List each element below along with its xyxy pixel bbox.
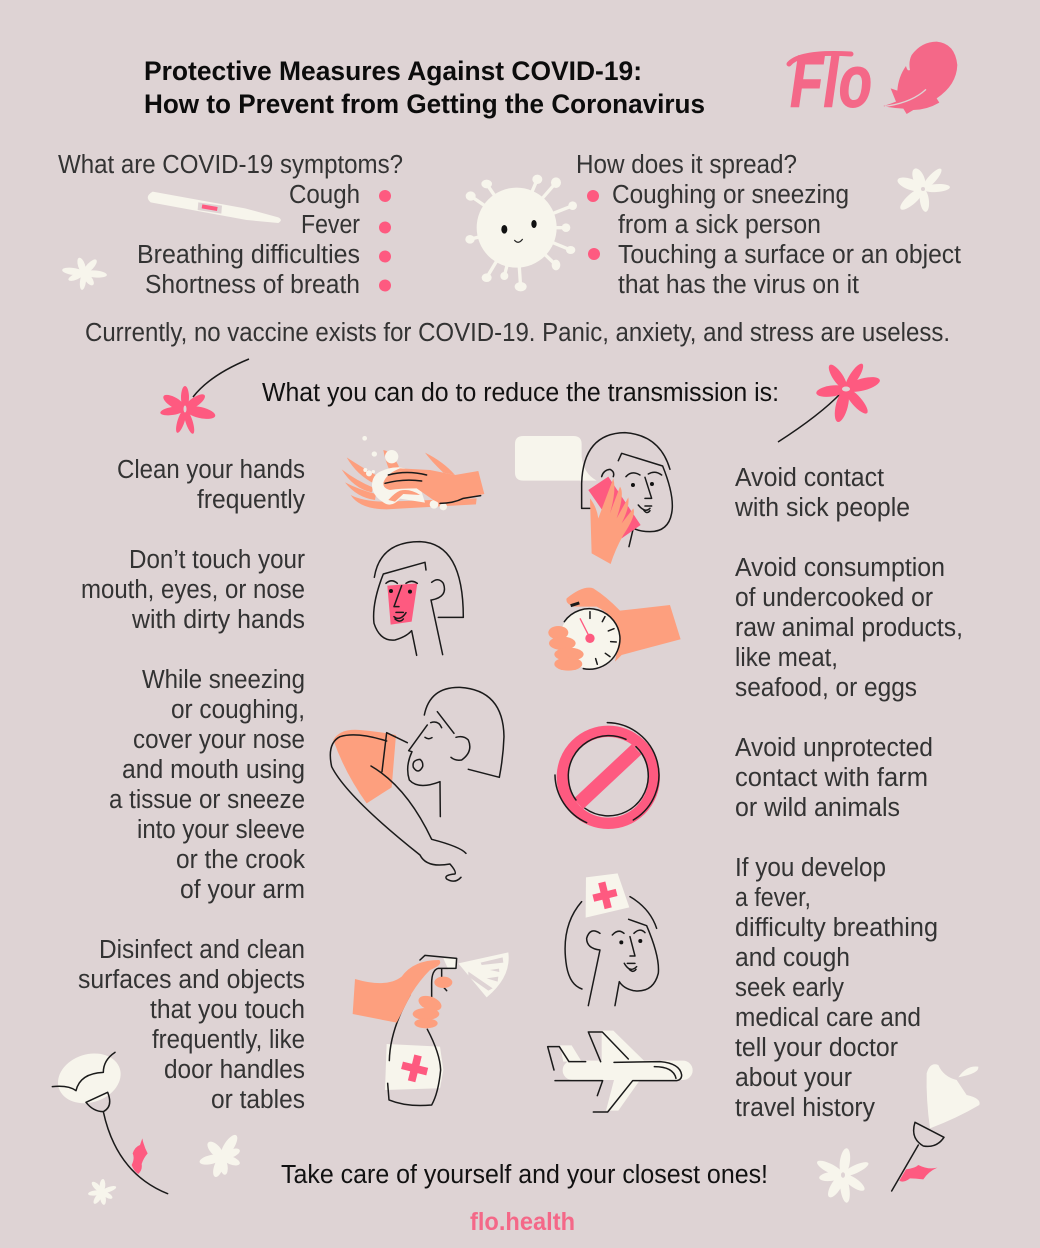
title: How to Prevent from Getting the Coronavirus <box>144 89 705 119</box>
text: avoid raw products: of undercooked or <box>735 584 933 612</box>
text: sneezing advice: into your sleeve <box>137 816 305 844</box>
icon: cream flower bottom left small <box>88 1179 117 1205</box>
logo: Flo: Flo <box>790 40 872 123</box>
text: sneezing advice <box>109 666 305 904</box>
icon: cream tulip bottom right <box>892 1064 980 1191</box>
closing message: Take care of yourself and your closest ones! <box>281 1161 768 1189</box>
text: clean hands: Clean your hands <box>117 456 305 484</box>
no vaccine statement: Currently, no vaccine exists for COVID-19. Panic, anxiety, and stress are useless. <box>85 319 950 347</box>
icon: stopwatch in hand <box>548 588 681 671</box>
text: avoid raw products: raw animal products, <box>735 614 963 642</box>
symptoms list: Cough <box>289 181 360 209</box>
text: avoid animals: contact with farm <box>735 764 928 792</box>
text: disinfect surfaces: surfaces and objects <box>78 966 305 994</box>
text: avoid animals: or wild animals <box>735 794 900 822</box>
text: disinfect surfaces <box>78 936 305 1114</box>
text: fever advice: medical care and <box>735 1004 921 1032</box>
spread list: Coughing or sneezing <box>612 181 849 209</box>
symptoms list: Shortness of breath <box>145 271 360 299</box>
icon: airplane <box>548 1031 693 1112</box>
text: sneezing advice: cover your nose <box>133 726 305 754</box>
icon: pink flower left <box>160 359 249 435</box>
text: sneezing advice: a tissue or sneeze <box>109 786 305 814</box>
symptoms heading: What are COVID-19 symptoms? <box>58 151 403 179</box>
text: avoid animals: Avoid unprotected <box>735 734 933 762</box>
icon: small flower left <box>62 257 107 290</box>
text: avoid raw products: like meat, <box>735 644 838 672</box>
text: avoid contact: with sick people <box>734 494 910 522</box>
website link: flo.health <box>470 1208 575 1236</box>
text: avoid contact <box>734 464 910 522</box>
text: disinfect surfaces: or tables <box>211 1086 305 1114</box>
text: do not touch face: mouth, eyes, or nose <box>81 576 305 604</box>
text: disinfect surfaces: door handles <box>164 1056 305 1084</box>
icon: pink flower right <box>778 361 881 442</box>
icon: cream tulip bottom left <box>51 1046 168 1194</box>
text: fever advice: about your <box>735 1064 852 1092</box>
symptoms list: Breathing difficulties <box>137 241 360 269</box>
text: avoid raw products: seafood, or eggs <box>735 674 917 702</box>
text: fever advice: If you develop <box>735 854 886 882</box>
icon: face with pink mask area <box>374 542 463 655</box>
text: disinfect surfaces: Disinfect and clean <box>99 936 305 964</box>
icon: prohibition sign <box>555 723 659 823</box>
text: sneezing advice: While sneezing <box>142 666 305 694</box>
text: avoid raw products: Avoid consumption <box>735 554 945 582</box>
icon: speech bubble and phone head <box>515 433 672 564</box>
title <box>144 56 705 119</box>
text: clean hands <box>117 456 305 514</box>
text: fever advice: a fever, <box>735 884 811 912</box>
spread list: Touching a surface or an object <box>618 241 961 269</box>
icon: spray bottle <box>353 952 509 1106</box>
logo: Flo <box>789 40 957 123</box>
spread list: that has the virus on it <box>618 271 859 299</box>
text: disinfect surfaces: frequently, like <box>152 1026 305 1054</box>
icon: cream flower bottom left large <box>199 1132 241 1178</box>
text: fever advice: and cough <box>735 944 850 972</box>
text: sneezing advice: and mouth using <box>122 756 305 784</box>
text: avoid raw products <box>735 554 963 702</box>
symptoms list <box>137 181 391 299</box>
spread list <box>587 181 961 299</box>
text: fever advice: travel history <box>735 1094 875 1122</box>
text: fever advice: tell your doctor <box>735 1034 898 1062</box>
text: do not touch face: with dirty hands <box>131 606 305 634</box>
icon: cream flower bottom right <box>815 1148 870 1203</box>
title: Protective Measures Against COVID-19: <box>144 56 642 86</box>
text: sneezing advice: or coughing, <box>171 696 305 724</box>
spread list: from a sick person <box>618 211 821 239</box>
text: fever advice: seek early <box>735 974 844 1002</box>
text: disinfect surfaces: that you touch <box>150 996 305 1024</box>
text: do not touch face: Don’t touch your <box>129 546 305 574</box>
text: clean hands: frequently <box>197 486 305 514</box>
text: fever advice: difficulty breathing <box>735 914 938 942</box>
icon: thermometer <box>148 192 281 223</box>
text: fever advice <box>735 854 938 1122</box>
text: do not touch face <box>81 546 305 634</box>
text: sneezing advice: or the crook <box>176 846 305 874</box>
symptoms list: Fever <box>301 211 360 239</box>
icon: virus <box>465 175 577 291</box>
spread heading: How does it spread? <box>576 151 797 179</box>
text: avoid contact: Avoid contact <box>735 464 884 492</box>
icon: washing hands <box>342 436 484 510</box>
text: avoid animals <box>735 734 933 822</box>
text: sneezing advice: of your arm <box>180 876 305 904</box>
subheading: What you can do to reduce the transmission is: <box>262 379 779 407</box>
icon: nurse <box>565 873 658 1006</box>
icon: cream flower top right <box>896 166 950 213</box>
icon: sneezing into elbow <box>330 687 504 881</box>
